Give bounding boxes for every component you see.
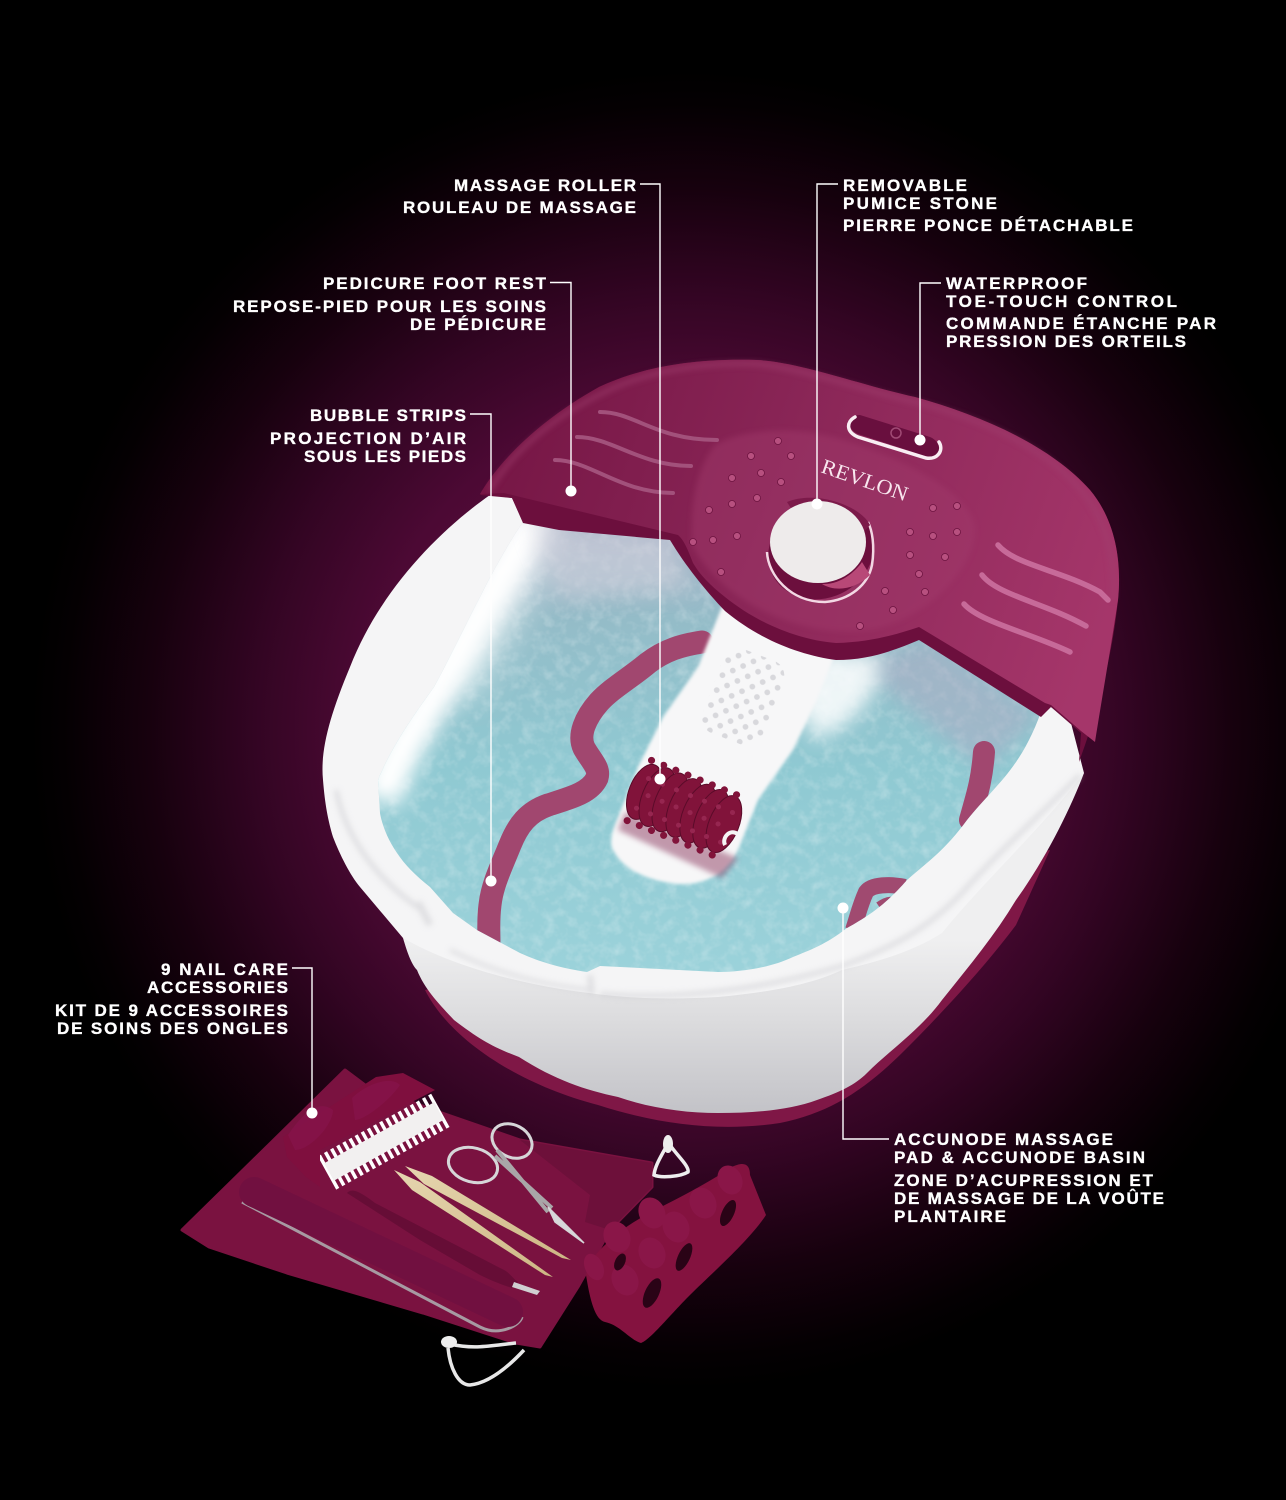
- dot: [914, 434, 926, 446]
- callout: removable pumice stone: [812, 176, 1133, 510]
- power icon: [891, 428, 901, 438]
- roller studs: [636, 779, 736, 843]
- label text: MASSAGE ROLLER: [454, 176, 636, 195]
- separator lobes: [580, 1161, 747, 1300]
- label text: PUMICE STONE: [843, 194, 997, 213]
- dot: [306, 1108, 318, 1118]
- rim shading: [336, 775, 1080, 996]
- label text: BUBBLE STRIPS: [310, 406, 466, 425]
- upper left wall haze: [450, 525, 540, 690]
- foot spa basin: [322, 360, 1119, 1127]
- label text: DE SOINS DES ONGLES: [57, 1019, 288, 1038]
- leader line: [640, 184, 660, 779]
- label text: 9 NAIL CARE: [161, 960, 288, 979]
- massage nubs on lid: [690, 438, 960, 630]
- label text: DE MASSAGE DE LA VOÛTE: [894, 1189, 1164, 1208]
- scissors: [444, 1117, 584, 1243]
- massage roller: [618, 757, 751, 861]
- revlon logo: REVLON: [818, 454, 911, 506]
- cuticle pusher: [347, 1191, 518, 1288]
- ripple grips left: [555, 412, 717, 493]
- leader line: [470, 414, 491, 881]
- haze near top left: [530, 525, 690, 600]
- label text: [843, 176, 1133, 235]
- leader line: [550, 282, 571, 491]
- label text: REMOVABLE: [843, 176, 967, 195]
- callout: accunode massage pad: [838, 902, 1164, 1226]
- nail brush body: [283, 1073, 435, 1187]
- dot: [654, 774, 666, 784]
- label text: [270, 406, 466, 466]
- pedicure foot rest tongue: [611, 604, 881, 884]
- upper drawstring: [654, 1137, 688, 1177]
- ripple grips right: [964, 545, 1108, 652]
- label text: ACCUNODE MASSAGE: [894, 1130, 1113, 1149]
- soft white wall blend: [380, 515, 535, 800]
- lid rim highlight: [490, 364, 1113, 600]
- callout: nail care accessories: [55, 960, 318, 1118]
- label text: ROULEAU DE MASSAGE: [403, 198, 636, 217]
- callout: massage roller: [403, 176, 666, 784]
- pumice stone: [752, 486, 890, 616]
- pouch gathered end: [520, 1140, 652, 1230]
- pumice ring: [767, 522, 873, 602]
- upper knot: [663, 1135, 673, 1153]
- label text: [403, 176, 636, 217]
- pouch: [182, 1070, 652, 1347]
- lower knot: [441, 1336, 457, 1348]
- bubble texture: [380, 542, 1038, 972]
- dot: [486, 876, 496, 886]
- leader line: [843, 908, 889, 1139]
- leader line: [292, 968, 312, 1113]
- tongue right haze: [795, 650, 881, 740]
- label text: COMMANDE ÉTANCHE PAR: [946, 314, 1216, 333]
- callout: waterproof toe-touch control: [914, 274, 1216, 446]
- dot: [566, 486, 576, 496]
- label text: [233, 274, 547, 334]
- label text: DE PÉDICURE: [410, 315, 546, 334]
- label text: PROJECTION D’AIR: [270, 429, 466, 448]
- callout: pedicure foot rest: [233, 274, 576, 496]
- nail care accessories: [182, 1070, 766, 1385]
- leader line: [817, 184, 838, 504]
- orange stick two: [405, 1166, 571, 1260]
- separator holes: [612, 1198, 739, 1310]
- lower drawstring: [448, 1343, 524, 1385]
- dot: [838, 902, 848, 914]
- label text: SOUS LES PIEDS: [304, 447, 466, 466]
- dot: [812, 498, 822, 510]
- nail file edge: [242, 1202, 522, 1331]
- lid dark underside: [480, 360, 1119, 762]
- foot rest nubs: [697, 644, 789, 750]
- label text: PEDICURE FOOT REST: [323, 274, 547, 293]
- label text: PRESSION DES ORTEILS: [946, 332, 1186, 351]
- label text: PIERRE PONCE DÉTACHABLE: [843, 216, 1133, 235]
- label text: [894, 1130, 1164, 1226]
- label text: PAD & ACCUNODE BASIN: [894, 1148, 1145, 1167]
- roller spikes: [627, 760, 744, 858]
- label text: ACCESSORIES: [147, 978, 288, 997]
- label text: [946, 274, 1216, 351]
- white rim: [322, 495, 1084, 998]
- bubble tube right: [970, 752, 984, 820]
- label text: TOE-TOUCH CONTROL: [946, 292, 1177, 311]
- roller end notch: [722, 830, 737, 848]
- accunode loop: [853, 885, 905, 930]
- white body: [403, 773, 1084, 1113]
- pusher tip: [512, 1282, 540, 1295]
- nail brush bristles: [327, 1110, 441, 1173]
- nail file: [254, 1192, 508, 1312]
- label text: ZONE D’ACUPRESSION ET: [894, 1171, 1154, 1190]
- central lid panel: [692, 431, 975, 632]
- upper right haze: [884, 644, 1031, 760]
- label text: PLANTAIRE: [894, 1207, 1006, 1226]
- label text: REPOSE-PIED POUR LES SOINS: [233, 297, 546, 316]
- roller shadow: [618, 812, 738, 878]
- water with bubble mat: [378, 523, 1040, 972]
- lid top surface: [480, 360, 1119, 742]
- label text: WATERPROOF: [946, 274, 1087, 293]
- toe-touch control button: [849, 415, 941, 458]
- magenta base: [425, 850, 1050, 1127]
- label text: KIT DE 9 ACCESSOIRES: [55, 1001, 288, 1020]
- toe separators: [580, 1161, 766, 1343]
- leader line: [920, 283, 941, 440]
- label text: [55, 960, 288, 1038]
- brush grips: [288, 1081, 400, 1150]
- callout: bubble strips: [270, 406, 496, 886]
- bubble tube left: [489, 642, 702, 945]
- orange stick one: [394, 1170, 553, 1277]
